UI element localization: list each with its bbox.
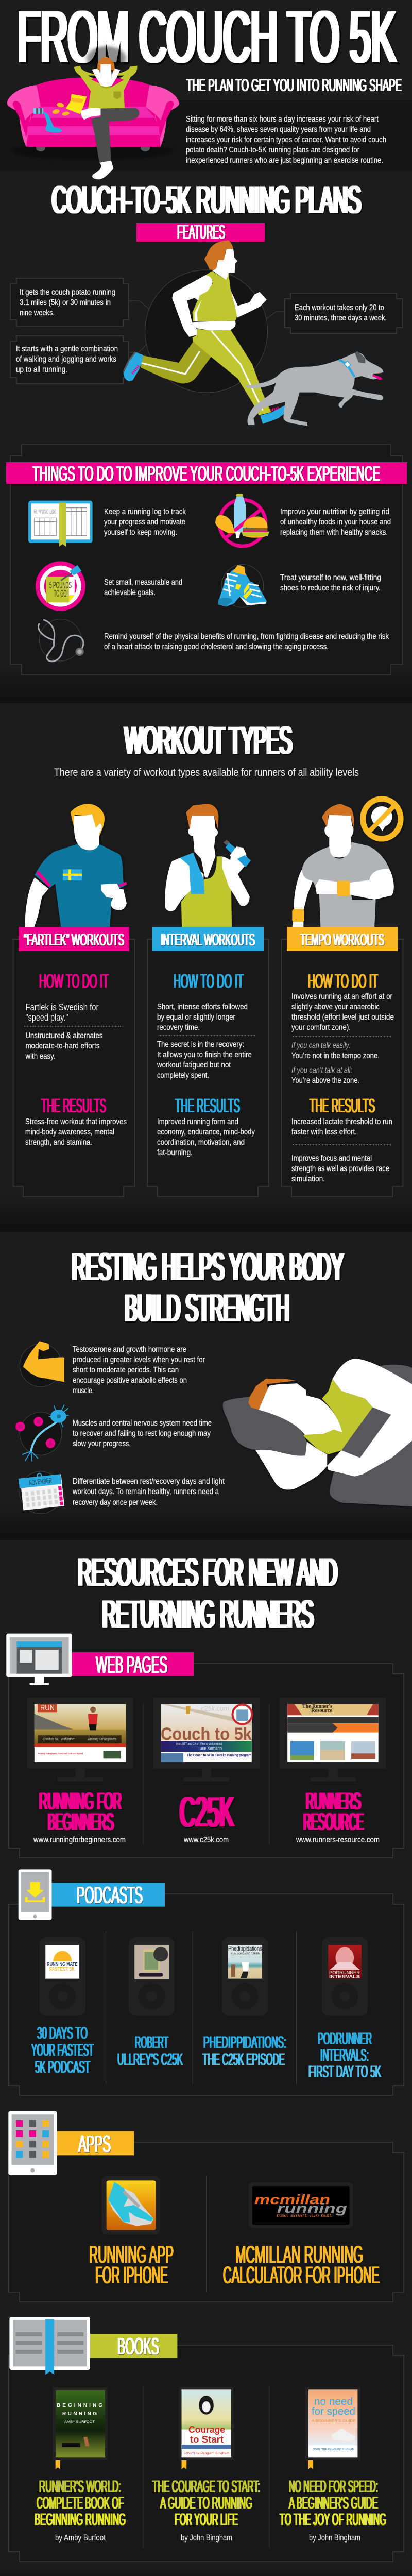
how to do it: It allows you to finish the entire <box>157 1050 252 1059</box>
text: goals <box>104 578 182 597</box>
icon: no junk food <box>215 494 269 546</box>
the results: strength, and stamina. <box>25 1138 92 1147</box>
podcast: 30 days: FASTEST 5K <box>49 1967 75 1972</box>
panel: feature two: It starts with a gentle combination <box>16 345 118 353</box>
podcast: robert ullrey: ULLREY'S C25K <box>117 2050 183 2069</box>
how to do it <box>291 971 394 1085</box>
icon: stethoscope <box>39 619 84 662</box>
book: no need for speed: JOHN “THE PENGUIN” BINGHAM <box>313 2448 354 2451</box>
podcast: robert ullrey: ROBERT <box>135 2033 168 2052</box>
how to do it: recovery time. <box>157 1023 200 1032</box>
podcast: 30 days: 30 DAYS TO <box>37 2024 88 2042</box>
text: shoes: Treat yourself to new, well-fitting <box>280 573 381 582</box>
site title: running for beginners <box>33 1787 126 1844</box>
book: runner's world: BEGINNING <box>57 2403 102 2409</box>
book: runner's world: RUNNER'S WORLD: <box>39 2477 121 2496</box>
fartlek runner <box>25 804 127 927</box>
text: nutrition: Improve your nutrition by getting rid <box>280 507 389 516</box>
panel: podcasts: YOUR FASTEST <box>31 2041 94 2059</box>
the results: mind-body awareness, mental <box>25 1128 114 1137</box>
book: the courage to start: A GUIDE TO RUNNING <box>160 2494 252 2512</box>
podcast: phedippidations <box>202 1937 286 2069</box>
how to do it: HOW TO DO IT <box>174 971 244 992</box>
site: running for beginners <box>27 1698 133 1782</box>
the results: simulation. <box>291 1175 325 1183</box>
panel: feature one: It gets the couch potato running <box>20 288 115 297</box>
the results <box>25 1095 127 1147</box>
the results: economy, endurance, mind-body <box>157 1128 255 1137</box>
site: running for beginners: RUN <box>40 1704 55 1713</box>
the results: THE RESULTS <box>41 1095 106 1117</box>
how to do it: with easy. <box>25 1052 56 1061</box>
site: runners resource: Resource <box>311 1708 333 1714</box>
ribbon: features <box>136 222 265 243</box>
podcast: podrunner: PODRUNNER <box>329 1970 360 1975</box>
ribbon: features: FEATURES <box>177 222 225 243</box>
app: running app: RUNNING APP <box>89 2241 174 2268</box>
intro paragraph <box>186 115 386 165</box>
ribbon and phone icon <box>19 1869 165 1920</box>
book: the courage to start: to Start <box>190 2434 224 2445</box>
icon: running log: RUNNING LOG <box>34 508 57 515</box>
icon: goal target <box>36 561 85 611</box>
intro paragraph: disease by 64%, shaves seven quality years from your life and <box>186 125 371 134</box>
interval runner <box>165 804 251 927</box>
intro paragraph: potato death? Couch-to-5K running plans are designed for <box>186 146 360 155</box>
podcast: podrunner <box>308 1937 381 2081</box>
how to do it: Involves running at an effort at or <box>291 992 393 1001</box>
how to do it: completely spent. <box>157 1071 209 1080</box>
icon: calendar <box>18 1471 64 1514</box>
site: c25k <box>153 1698 260 1782</box>
the results <box>157 1095 255 1157</box>
spilled drink <box>33 108 62 132</box>
the results <box>291 1095 392 1183</box>
site: running for beginners: Couch to 5K... and further <box>43 1738 75 1741</box>
ribbon label: PODCASTS <box>77 1882 143 1908</box>
site: c25k: c25k.com <box>201 1704 229 1713</box>
book: the courage to start: Courage <box>188 2425 225 2435</box>
illustration: sleeping runner <box>223 1359 412 1506</box>
text: muscles and nervous system <box>73 1419 212 1448</box>
chips <box>51 94 87 116</box>
site title: c25k: www.c25k.com <box>183 1836 229 1844</box>
panel: feature two: up to all running. <box>16 365 67 374</box>
podcast: 30 days <box>31 1937 94 2076</box>
book: runner's world: by Amby Burfoot <box>55 2533 106 2543</box>
text: testosterone: muscle. <box>73 1386 94 1395</box>
ribbon and book icon <box>9 2317 177 2375</box>
ribbon and tablet icon <box>8 2111 134 2175</box>
site: runners resource: The Runner's <box>302 1704 332 1709</box>
runner <box>124 240 286 424</box>
panel: web pages <box>6 1634 404 1858</box>
the results: Increased lactate threshold to run <box>291 1117 392 1126</box>
ribbon label: APPS <box>78 2130 111 2157</box>
site: runners resource <box>280 1698 386 1782</box>
podcast: phedippidations: Phedippidations <box>228 1946 262 1952</box>
book: no need for speed: for speed <box>312 2406 355 2417</box>
book: runner's world: RUNNING <box>62 2411 97 2417</box>
podcast: phedippidations: RUN LONG AND TAPER <box>231 1953 260 1956</box>
app: running app <box>89 2176 174 2289</box>
book: no need for speed <box>280 2387 386 2543</box>
how to do it <box>157 971 256 1080</box>
icon: running log <box>28 501 93 547</box>
icon: no talking <box>363 799 401 839</box>
banner: INTERVAL WORKOUTS <box>161 930 255 949</box>
text: goals: achievable goals. <box>104 588 156 597</box>
how to do it <box>24 971 122 1061</box>
text: testosterone <box>73 1345 205 1395</box>
illustration: runner and dog <box>124 240 384 426</box>
text: goals: Set small, measurable and <box>104 578 182 587</box>
panel: interval workouts <box>147 927 269 1197</box>
feature circle <box>145 270 268 393</box>
app: mcmillan <box>223 2182 380 2289</box>
book: the courage to start: THE COURAGE TO START: <box>152 2477 260 2496</box>
icon: flexed muscle <box>20 1341 64 1387</box>
text: running log: your progress and motivate <box>104 518 185 527</box>
panel: podcasts <box>9 1869 404 2095</box>
text: rest days <box>72 1477 225 1507</box>
text: rest days: workout days. To remain healthy, runners need a <box>72 1487 219 1496</box>
panel: apps <box>8 2111 404 2302</box>
the results: Improves focus and mental <box>291 1154 372 1163</box>
text: testosterone: short to moderate periods. This can <box>73 1366 179 1375</box>
site title: runners resource: www.runners-resource.com <box>296 1836 380 1844</box>
how to do it: You’re not in the tempo zone. <box>291 1052 380 1060</box>
illustration: three runners <box>25 799 401 927</box>
banner <box>152 927 264 951</box>
how to do it: HOW TO DO IT <box>39 971 109 992</box>
workout types subtitle: There are a variety of workout types available for runners of all ability levels <box>54 767 359 778</box>
site: c25k: Couch to 5k <box>161 1724 252 1744</box>
the results: THE RESULTS <box>175 1095 240 1117</box>
ribbon label: WEB PAGES <box>96 1651 167 1678</box>
panel: things to do <box>6 445 407 675</box>
app: mcmillan: mcmillan <box>254 2192 330 2207</box>
the results: faster with less effort. <box>291 1128 357 1137</box>
panel: feature one <box>10 278 129 326</box>
panel: feature one: nine weeks. <box>20 309 55 317</box>
panel: feature three: 30 minutes, three days a week. <box>295 314 387 323</box>
the results: coordination, motivation, and <box>157 1138 245 1147</box>
how to do it: Unstructured & alternates <box>26 1031 103 1040</box>
ribbon and monitor icon <box>6 1634 194 1685</box>
site: c25k: The Couch to 5k in 9 weeks running program <box>187 1754 251 1757</box>
text: rest days: recovery day once per week. <box>73 1498 158 1507</box>
how to do it: moderate-to-hard efforts <box>26 1042 100 1050</box>
book: no need for speed: by John Bingham <box>309 2533 360 2543</box>
how to do it: slightly above your anaerobic <box>291 1003 380 1011</box>
how to do it: Short, intense efforts followed <box>157 1003 248 1011</box>
text: testosterone: Testosterone and growth hormone are <box>73 1345 186 1354</box>
text: physical benefits: of a heart attack to raising good cholesterol and slowing the aging process. <box>104 642 329 651</box>
text: nutrition: replacing them with healthy snacks. <box>280 528 388 537</box>
book: runner's world <box>35 2387 126 2543</box>
panel: books <box>9 2317 404 2562</box>
panel: books: BOOKS <box>117 2333 159 2360</box>
book: runner's world: COMPLETE BOOK OF <box>37 2494 124 2512</box>
book: the courage to start <box>152 2387 260 2543</box>
icon: goal target: TO GO! <box>54 588 68 599</box>
site title: c25k <box>180 1788 234 1844</box>
how to do it: The secret is in the recovery: <box>157 1040 244 1049</box>
site title: runners resource <box>296 1787 380 1844</box>
dog <box>246 351 384 426</box>
how to do it: You’re above the zone. <box>291 1076 359 1085</box>
site: running for beginners: Running for Beginners, from Couch to 5K and Beyond <box>38 1752 83 1755</box>
how to do it: "speed play." <box>26 1012 68 1023</box>
text: shoes: shoes to reduce the risk of injury. <box>280 584 381 592</box>
site title: running for beginners: RUNNING FOR <box>39 1787 122 1815</box>
text: running log: Keep a running log to track <box>104 507 186 516</box>
text: running log <box>104 507 186 537</box>
panel: feature one: 3.1 miles (5k) or 30 minutes in <box>20 298 111 307</box>
the results: Improved running form and <box>157 1117 238 1126</box>
podcast: podrunner: INTERVALS <box>329 1974 360 1979</box>
text: testosterone: encourage positive anabolic effects on <box>73 1376 187 1385</box>
app: running app: FOR IPHONE <box>95 2261 168 2289</box>
text: shoes <box>280 573 381 592</box>
feature connectors <box>129 301 285 352</box>
book: the courage to start: by John Bingham <box>181 2533 232 2543</box>
how to do it: your comfort zone). <box>291 1023 351 1032</box>
text: testosterone: produced in greater levels when you rest for <box>73 1355 205 1364</box>
illustration: man on couch <box>7 46 179 179</box>
book: the courage to start: John “The Penguin” Bingham <box>184 2452 229 2455</box>
text: muscles and nervous system: to recover and failing to rest long enough may <box>73 1429 211 1438</box>
podcast: 30 days: 5K PODCAST <box>35 2058 90 2076</box>
text: nutrition <box>280 507 391 537</box>
book: no need for speed: no need <box>314 2396 353 2408</box>
site title: running for beginners: BEGINNERS <box>48 1808 114 1835</box>
panel: feature two <box>10 336 129 384</box>
icon: neuron <box>15 1405 69 1462</box>
text: physical benefits <box>104 632 389 651</box>
site title: running for beginners: www.runningforbeginners.com <box>33 1836 126 1844</box>
text: nutrition: of unhealthy foods in your house and <box>280 518 391 527</box>
podcast: phedippidations: PHEDIPPIDATIONS: <box>203 2033 286 2052</box>
book: no need for speed: A BEGINNER'S GUIDE <box>312 2420 356 2423</box>
banner <box>19 927 129 951</box>
how to do it: If you can’t talk at all: <box>291 1066 352 1075</box>
panel: feature two: of walking and jogging and works <box>16 355 116 364</box>
how to do it: workout fatigued but not <box>157 1061 231 1070</box>
the results: strength as well as provides race <box>291 1164 389 1173</box>
icon: running shoes <box>218 565 267 607</box>
text: running log: yourself to keep moving. <box>104 528 177 537</box>
app: mcmillan: train smart. run fast. <box>277 2213 333 2218</box>
podcast: 30 days: RUNNING MATE <box>47 1962 78 1968</box>
book: runner's world: BEGINNING RUNNING <box>35 2510 126 2529</box>
heading: resources <box>78 1551 337 1636</box>
the results: fat-burning. <box>157 1148 193 1157</box>
how to do it: threshold (effort level just outside <box>291 1013 394 1022</box>
how to do it: Fartlek is Swedish for <box>26 1002 99 1012</box>
site: c25k: use Xamarin <box>200 1745 222 1751</box>
panel: fartlek workouts <box>13 927 135 1197</box>
panel: feature three: Each workout takes only 20 to <box>295 303 384 312</box>
text: muscles and nervous system: Muscles and central nervous system need time <box>73 1419 212 1428</box>
book: runner's world: AMBY BURFOOT <box>64 2421 95 2424</box>
panel: tempo workouts <box>281 927 403 1197</box>
site: c25k: Use .NET and C# on iPhone and Android <box>176 1743 222 1746</box>
panel: feature three <box>285 293 403 333</box>
app: mcmillan: running <box>277 2200 347 2216</box>
text: muscles and nervous system: slow your progress. <box>73 1439 131 1448</box>
tempo runner <box>292 804 394 927</box>
the results: Stress-free workout that improves <box>25 1117 127 1126</box>
how to do it: If you can talk easily: <box>291 1041 351 1050</box>
banner: “FARTLEK” WORKOUTS <box>24 930 124 949</box>
heading: resting helps your body build strength <box>72 1245 344 1330</box>
podcast: robert ullrey <box>117 1937 183 2069</box>
how to do it: by equal or slightly longer <box>157 1013 236 1022</box>
icon: calendar: NOVEMBER <box>28 1476 53 1487</box>
site title: c25k: C25K <box>180 1788 234 1836</box>
icon: goal target: 5 POUNDS <box>49 580 72 590</box>
site: running for beginners: Running For Beginners <box>88 1738 116 1741</box>
book: the courage to start: FOR YOUR LIFE <box>175 2510 238 2529</box>
banner <box>287 927 398 951</box>
text: rest days: Differentiate between rest/recovery days and light <box>73 1477 225 1486</box>
podcast: phedippidations: THE C25K EPISODE <box>202 2050 285 2069</box>
